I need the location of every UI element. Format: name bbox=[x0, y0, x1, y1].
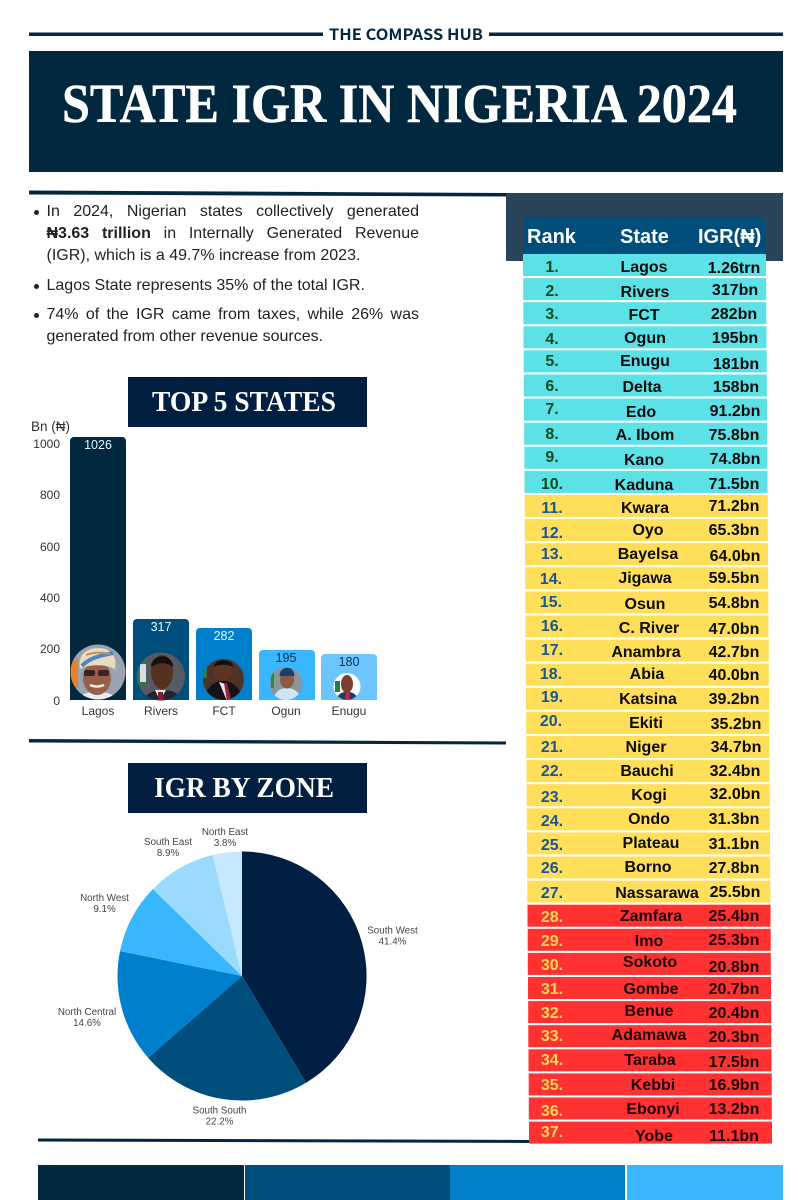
row 28: 25.4bn bbox=[709, 908, 759, 925]
row 4 bbox=[524, 326, 766, 348]
row 19: 39.2bn bbox=[709, 691, 759, 708]
intro bullet text bbox=[34, 203, 419, 345]
row 3: 3. bbox=[545, 306, 559, 323]
row 30 bbox=[528, 953, 771, 976]
row 14: 59.5bn bbox=[709, 570, 759, 587]
bar: Lagos: 1026 bbox=[84, 438, 112, 452]
row 6 bbox=[524, 374, 767, 396]
row 31: 20.7bn bbox=[709, 981, 759, 998]
row 4: 195bn bbox=[712, 330, 758, 347]
y axis: Bn (₦) bbox=[31, 419, 70, 434]
row 35: Kebbi bbox=[631, 1077, 675, 1094]
row 15: Osun bbox=[625, 596, 665, 613]
bar: Ogun: 195 bbox=[276, 651, 296, 665]
label: North Central: North Central bbox=[58, 1007, 116, 1018]
y axis: 0 bbox=[53, 694, 60, 708]
row 24: 31.3bn bbox=[709, 811, 759, 828]
masthead: The Compass Hub bbox=[29, 23, 783, 45]
row 3 bbox=[523, 302, 766, 324]
row 10: Kaduna bbox=[615, 477, 673, 494]
row 33: Adamawa bbox=[612, 1027, 686, 1044]
row 2 bbox=[523, 278, 766, 301]
row 10 bbox=[524, 471, 768, 494]
row 35: 16.9bn bbox=[709, 1077, 759, 1094]
slice: North West bbox=[120, 889, 242, 976]
y axis: 800 bbox=[40, 488, 60, 502]
slice: North Central bbox=[117, 951, 242, 1058]
row 30: Sokoto bbox=[623, 954, 677, 971]
row 7: Edo bbox=[626, 404, 656, 421]
row 20: 20. bbox=[540, 713, 562, 730]
row 35 bbox=[529, 1073, 772, 1095]
label: South South: South South bbox=[193, 1106, 246, 1116]
row 8 bbox=[524, 423, 767, 445]
bar: Enugu bbox=[321, 654, 377, 718]
row 20: 35.2bn bbox=[711, 716, 761, 733]
label: South West: South West bbox=[367, 926, 418, 936]
bar: Ogun bbox=[259, 650, 315, 718]
row 27: 25.5bn bbox=[710, 884, 760, 901]
table header: State bbox=[620, 226, 669, 248]
row 13: 64.0bn bbox=[710, 548, 760, 565]
row 25: 25. bbox=[541, 837, 563, 854]
row 37: 11.1bn bbox=[709, 1128, 759, 1145]
portrait: Rivers bbox=[136, 652, 186, 701]
row 8: A. Ibom bbox=[616, 427, 674, 444]
label: North East: North East bbox=[202, 827, 248, 838]
bullet: Lagos share: Lagos State represents 35% of the total IGR. bbox=[46, 277, 365, 294]
row 24: Ondo bbox=[628, 811, 670, 828]
row 5 bbox=[524, 350, 767, 373]
title banner bbox=[29, 51, 783, 172]
row 20 bbox=[526, 712, 769, 734]
row 27 bbox=[527, 881, 770, 903]
row 12: 65.3bn bbox=[709, 522, 759, 539]
row 4: Ogun bbox=[624, 330, 666, 347]
row 17: Anambra bbox=[611, 644, 681, 661]
row 23 bbox=[527, 784, 770, 806]
y axis: 600 bbox=[40, 540, 60, 554]
row 14 bbox=[525, 567, 768, 589]
row 1: 1. bbox=[545, 259, 559, 276]
row 23: Kogi bbox=[631, 787, 667, 804]
row 9 bbox=[524, 447, 767, 469]
row 7: 91.2bn bbox=[710, 403, 760, 420]
portrait: Lagos bbox=[70, 644, 126, 701]
row 10: 10. bbox=[541, 476, 563, 493]
row 15 bbox=[525, 591, 768, 613]
row 22: Bauchi bbox=[620, 763, 674, 780]
row 37: 37. bbox=[541, 1124, 563, 1141]
row 7 bbox=[524, 399, 767, 421]
bar: FCT bbox=[196, 628, 252, 718]
row 10: 71.5bn bbox=[709, 476, 759, 493]
row 18 bbox=[526, 664, 769, 686]
row 22: 22. bbox=[541, 763, 563, 780]
row 14: Jigawa bbox=[618, 570, 672, 587]
bar: FCT: FCT bbox=[212, 704, 236, 718]
slice: South East bbox=[153, 855, 242, 976]
row 36: 13.2bn bbox=[709, 1101, 759, 1118]
row 4: 4. bbox=[545, 331, 559, 348]
row 32: 20.4bn bbox=[709, 1005, 759, 1022]
bar: Lagos bbox=[70, 437, 126, 718]
slice: South West bbox=[242, 851, 367, 1083]
row 18: 40.0bn bbox=[709, 667, 759, 684]
portrait: Enugu bbox=[333, 673, 361, 701]
row 24 bbox=[527, 808, 770, 830]
row 30: 20.8bn bbox=[709, 959, 759, 976]
heading: top 5 states bbox=[128, 377, 367, 427]
row 12: 12. bbox=[541, 525, 563, 542]
row 2: 2. bbox=[545, 283, 559, 300]
row 1: Lagos bbox=[620, 259, 668, 276]
row 31: Gombe bbox=[623, 981, 679, 998]
row 2: 317bn bbox=[712, 282, 758, 299]
bar: Lagos: Lagos bbox=[82, 704, 114, 718]
label: North West: North West bbox=[80, 893, 129, 904]
bullet: total IGR: In 2024, Nigerian states collectively generated ₦3.63 trillion in Internally Generated Revenue (IGR), which is a 49.7% increase from 2023. bbox=[46, 203, 419, 264]
row 16: C. River bbox=[619, 620, 679, 637]
heading: IGR by zone bbox=[128, 763, 367, 813]
row 9: 74.8bn bbox=[710, 451, 760, 468]
row 24: 24. bbox=[541, 813, 563, 830]
row 34: 17.5bn bbox=[709, 1054, 759, 1071]
row 12 bbox=[525, 519, 768, 542]
slice: North East bbox=[213, 852, 242, 976]
bar chart: top 5 states bbox=[31, 419, 377, 718]
row 22: 32.4bn bbox=[710, 763, 760, 780]
row 23: 23. bbox=[541, 789, 563, 806]
row 16 bbox=[526, 616, 768, 638]
row 18: Abia bbox=[630, 666, 664, 683]
row 2: Rivers bbox=[621, 284, 670, 301]
row 7: 7. bbox=[545, 401, 559, 418]
row 3: 282bn bbox=[711, 306, 757, 323]
row 23: 32.0bn bbox=[710, 786, 760, 803]
bar: Enugu: Enugu bbox=[332, 704, 366, 718]
row 21: 34.7bn bbox=[711, 739, 761, 756]
footer colour band bbox=[38, 1165, 783, 1200]
row 16: 47.0bn bbox=[709, 621, 759, 638]
row 9: 9. bbox=[545, 449, 559, 466]
row 17: 17. bbox=[541, 642, 563, 659]
row 31 bbox=[528, 977, 771, 999]
row 19 bbox=[526, 688, 769, 710]
row 3: FCT bbox=[628, 307, 660, 324]
row 36: 36. bbox=[541, 1103, 563, 1120]
row 26: 27.8bn bbox=[709, 860, 759, 877]
row 5: 181bn bbox=[713, 356, 759, 373]
row 29: 29. bbox=[541, 933, 563, 950]
row 14: 14. bbox=[540, 571, 562, 588]
row 17 bbox=[526, 640, 769, 662]
label: North Central: 14.6% bbox=[73, 1018, 101, 1029]
row 1 bbox=[523, 254, 766, 277]
row 13: Bayelsa bbox=[618, 546, 678, 563]
y axis: 400 bbox=[40, 591, 60, 605]
heading: IGR by zone: IGR BY ZONE bbox=[154, 773, 334, 804]
row 34: 34. bbox=[541, 1052, 563, 1069]
portrait: Ogun bbox=[269, 667, 303, 701]
row 15: 54.8bn bbox=[709, 595, 759, 612]
row 37: Yobe bbox=[635, 1128, 673, 1145]
row 16: 16. bbox=[541, 618, 563, 635]
label: South South: 22.2% bbox=[206, 1116, 234, 1128]
y axis: 200 bbox=[40, 642, 60, 656]
row 13: 13. bbox=[541, 546, 563, 563]
portrait: FCT bbox=[202, 658, 245, 701]
row 29: 25.3bn bbox=[709, 932, 759, 949]
row 33: 33. bbox=[541, 1028, 563, 1045]
y axis: 1000 bbox=[33, 437, 60, 451]
row 36: Ebonyi bbox=[626, 1101, 680, 1118]
row 35: 35. bbox=[541, 1077, 563, 1094]
bar: Rivers: Rivers bbox=[144, 704, 178, 718]
row 8: 75.8bn bbox=[709, 427, 759, 444]
row 26: 26. bbox=[541, 860, 563, 877]
ranking table bbox=[506, 193, 783, 1145]
row 11: 11. bbox=[541, 500, 563, 517]
row 26 bbox=[527, 856, 770, 878]
row 21: Niger bbox=[626, 739, 666, 756]
row 18: 18. bbox=[540, 666, 562, 683]
row 22 bbox=[526, 760, 770, 782]
row 15: 15. bbox=[540, 594, 562, 611]
table header bbox=[523, 217, 766, 254]
row 33 bbox=[528, 1025, 771, 1047]
row 6: Delta bbox=[622, 379, 662, 396]
row 17: 42.7bn bbox=[709, 644, 759, 661]
row 13 bbox=[525, 543, 768, 565]
row 5: 5. bbox=[545, 353, 559, 370]
bar: Enugu: 180 bbox=[339, 655, 359, 669]
bar: Rivers: 317 bbox=[151, 620, 171, 634]
row 32 bbox=[528, 1001, 771, 1023]
row 28 bbox=[528, 905, 770, 927]
row 6: 6. bbox=[545, 378, 559, 395]
label: South East: 8.9% bbox=[157, 848, 179, 859]
heading: top 5 states: TOP 5 STATES bbox=[152, 387, 336, 418]
row 34 bbox=[528, 1049, 772, 1071]
row 32: 32. bbox=[541, 1005, 563, 1022]
row 32: Benue bbox=[625, 1003, 674, 1020]
table header: IGR(₦) bbox=[698, 226, 761, 248]
row 9: Kano bbox=[624, 452, 664, 469]
row 25: Plateau bbox=[623, 835, 679, 852]
row 25: 31.1bn bbox=[709, 836, 759, 853]
label: North West: 9.1% bbox=[93, 904, 116, 915]
row 21 bbox=[526, 736, 769, 758]
row 31: 31. bbox=[541, 981, 563, 998]
label: North East: 3.8% bbox=[214, 838, 236, 849]
row 20: Ekiti bbox=[629, 715, 663, 732]
title banner: STATE IGR IN NIGERIA 2024 bbox=[62, 73, 737, 134]
row 29: Imo bbox=[635, 933, 663, 950]
row 30: 30. bbox=[541, 957, 563, 974]
row 28: Zamfara bbox=[620, 908, 682, 925]
row 25 bbox=[527, 832, 770, 854]
bar: FCT: 282 bbox=[214, 629, 234, 643]
row 27: Nassarawa bbox=[615, 885, 699, 902]
row 1: 1.26trn bbox=[708, 260, 760, 277]
row 29 bbox=[528, 929, 771, 951]
y axis bbox=[31, 419, 70, 708]
row 11 bbox=[525, 495, 768, 517]
row 19: Katsina bbox=[619, 691, 677, 708]
row 8: 8. bbox=[545, 426, 559, 443]
label: South East: South East bbox=[144, 837, 192, 848]
table header: Rank bbox=[527, 226, 577, 248]
row 26: Borno bbox=[624, 859, 672, 876]
table backdrop bbox=[506, 193, 783, 261]
row 33: 20.3bn bbox=[709, 1029, 759, 1046]
row 34: Taraba bbox=[624, 1052, 676, 1069]
row 6: 158bn bbox=[713, 379, 759, 396]
row 27: 27. bbox=[541, 885, 563, 902]
row 12: Oyo bbox=[632, 522, 664, 539]
label: South West: 41.4% bbox=[379, 936, 407, 948]
row 37 bbox=[529, 1122, 772, 1145]
row 21: 21. bbox=[541, 739, 563, 756]
row 36 bbox=[529, 1098, 772, 1120]
masthead: The Compass Hub: THE COMPASS HUB bbox=[329, 23, 483, 45]
bullet: taxes share: 74% of the IGR came from taxes, while 26% was generated from other revenue sources. bbox=[46, 306, 419, 345]
row 11: 71.2bn bbox=[709, 498, 759, 515]
slice: South South bbox=[148, 976, 306, 1101]
row 5: Enugu bbox=[620, 353, 670, 370]
row 28: 28. bbox=[541, 909, 563, 926]
row 11: Kwara bbox=[621, 500, 669, 517]
bar: Ogun: Ogun bbox=[271, 704, 301, 718]
bar: Rivers bbox=[133, 619, 189, 718]
row 19: 19. bbox=[541, 689, 563, 706]
pie chart: IGR by zone bbox=[58, 827, 418, 1128]
